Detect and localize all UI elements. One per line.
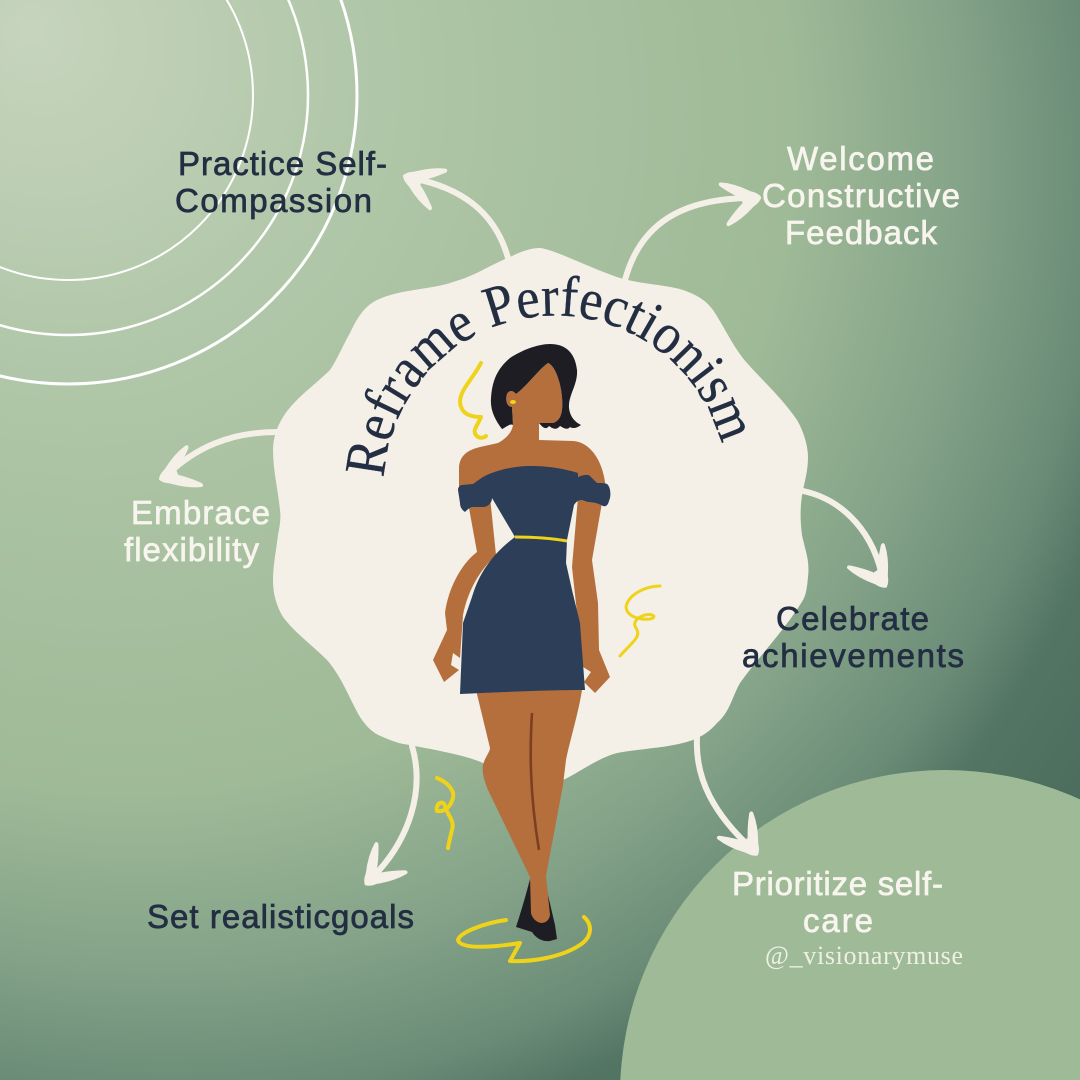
arrow: achievements — [803, 491, 903, 598]
central scalloped panel — [273, 248, 808, 784]
label: practice self-compassion: Compassion — [175, 182, 372, 219]
arrow: feedback — [625, 177, 764, 280]
arrow: self-care — [697, 738, 774, 867]
leg line and legs — [476, 690, 582, 941]
arrows — [153, 156, 903, 899]
label: embrace flexibility: flexibility — [124, 531, 260, 568]
label: practice self-compassion: Practice Self- — [178, 145, 387, 182]
handle: @_visionarymuse — [765, 941, 963, 970]
belt — [515, 537, 567, 541]
figure: woman in blue dress — [433, 344, 610, 941]
label: set realistic goals: Set realisticgoals — [147, 898, 414, 935]
label: celebrate achievements — [742, 600, 964, 674]
label: practice self-compassion — [175, 145, 387, 219]
head, neck and shoulders — [459, 363, 605, 490]
hair — [491, 344, 581, 429]
label: prioritize self-care: Prioritize self- — [732, 865, 943, 902]
label: welcome constructive feedback: Welcome — [787, 140, 934, 177]
label: celebrate achievements: Celebrate — [776, 600, 929, 637]
label: welcome constructive feedback: Constructive — [762, 177, 960, 214]
label: prioritize self-care: care — [803, 902, 873, 939]
label: prioritize self-care — [732, 865, 943, 939]
earring — [510, 400, 516, 404]
label: welcome constructive feedback: Feedback — [785, 214, 938, 251]
arrow: goals — [351, 746, 417, 899]
squiggles — [437, 363, 660, 961]
label: celebrate achievements: achievements — [742, 637, 964, 674]
arrow: self-compassion — [396, 156, 508, 258]
label: welcome constructive feedback — [762, 140, 960, 251]
label: embrace flexibility — [124, 494, 270, 568]
title: curved: Reframe Perfectionism — [346, 276, 745, 476]
concentric rings — [0, 0, 357, 384]
arrow: flexibility — [153, 432, 277, 499]
large circle bottom right — [620, 770, 1080, 1080]
dress — [458, 466, 610, 694]
arms — [433, 497, 610, 693]
label: embrace flexibility: Embrace — [131, 494, 270, 531]
